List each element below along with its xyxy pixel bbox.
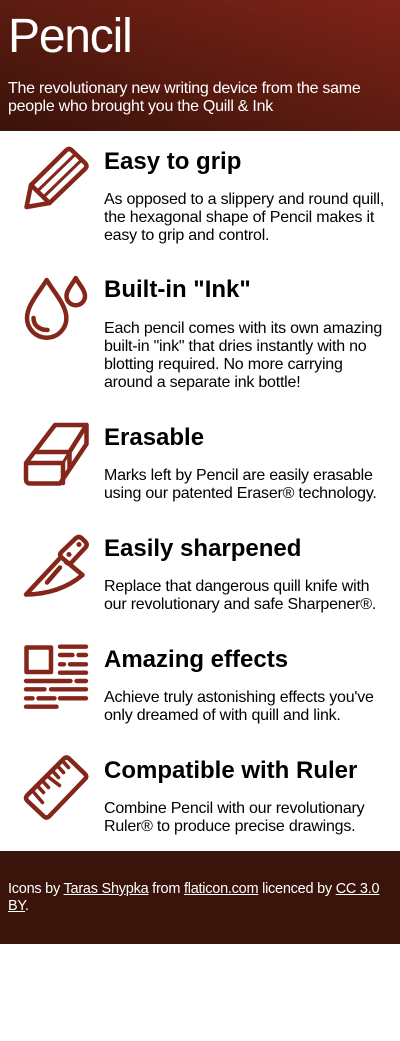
text: easy to grip — [104, 191, 384, 244]
credits: BY. — [8, 898, 29, 914]
text: built-in ink: built-in "ink" that dries instantly with no — [104, 338, 366, 355]
icon: knife — [24, 534, 89, 597]
text: built-in ink — [104, 320, 382, 391]
text: compatible with ruler — [104, 800, 365, 835]
text: built-in ink: around a separate ink bottle! — [104, 374, 300, 391]
text: amazing effects: Achieve truly astonishing effects you've — [104, 689, 374, 706]
icon: ruler — [24, 755, 88, 820]
text: erasable — [104, 467, 377, 502]
heading: compatible with ruler: Compatible with Ruler — [104, 757, 357, 784]
text: easily sharpened: our revolutionary and safe Sharpener®. — [104, 596, 376, 613]
heading: erasable: Erasable — [104, 424, 204, 451]
text: built-in ink: Each pencil comes with its own amazing — [104, 320, 382, 337]
footer — [0, 851, 400, 944]
heading: built-in ink: Built-in "Ink" — [104, 276, 251, 303]
credits: Icons by Taras Shypka from flaticon.com licenced by CC 3.0 — [8, 881, 379, 897]
text: easy to grip: the hexagonal shape of Pencil makes it — [104, 209, 374, 226]
icon: newspaper — [24, 644, 88, 709]
heading: easy to grip: Easy to grip — [104, 148, 241, 175]
text: easy to grip: As opposed to a slippery and round quill, — [104, 191, 384, 208]
text: erasable: using our patented Eraser® technology. — [104, 485, 377, 502]
heading: easily sharpened: Easily sharpened — [104, 535, 301, 562]
text: compatible with ruler: Ruler® to produce precise drawings. — [104, 818, 355, 835]
subtitle: people who brought you the Quill & Ink — [8, 98, 273, 115]
text: erasable: Marks left by Pencil are easily erasable — [104, 467, 373, 484]
icon: ink drops — [24, 276, 88, 340]
subtitle — [8, 80, 360, 115]
text: amazing effects — [104, 689, 374, 724]
text: easily sharpened — [104, 578, 376, 613]
icon: pencil — [24, 146, 89, 210]
subtitle: The revolutionary new writing device from the same — [8, 80, 360, 97]
text: easy to grip: easy to grip and control. — [104, 227, 269, 244]
icon: eraser — [24, 422, 89, 486]
text: easily sharpened: Replace that dangerous quill knife with — [104, 578, 369, 595]
text: amazing effects: only dreamed of with quill and link. — [104, 707, 341, 724]
title: Pencil — [8, 10, 132, 63]
header banner — [0, 0, 400, 131]
credits — [8, 881, 380, 914]
text: built-in ink: blotting required. No more carrying — [104, 356, 343, 373]
heading: amazing effects: Amazing effects — [104, 646, 288, 673]
text: compatible with ruler: Combine Pencil with our revolutionary — [104, 800, 364, 817]
